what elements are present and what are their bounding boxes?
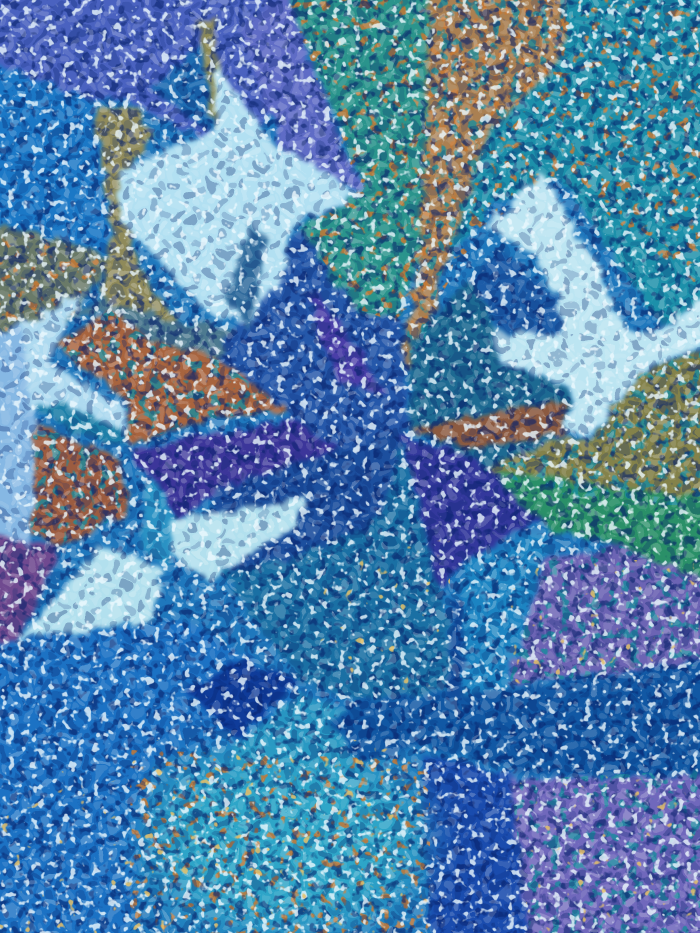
region: left bright blue [0, 60, 120, 290]
region: purple lower right [510, 770, 700, 933]
region: shadow strip near star [60, 300, 230, 360]
region: teal-blue right lower [462, 530, 550, 695]
region: soft teal glow at bottom centre [145, 745, 425, 933]
region: brown ray [405, 400, 565, 450]
dove: lower left [20, 545, 165, 640]
region: right of centre teal-blue [410, 270, 575, 470]
region: dark blue bottom [420, 755, 530, 933]
region: central blue field [220, 230, 410, 450]
region: dark blue band [330, 660, 700, 775]
dove wing: lower right [170, 497, 305, 580]
region: inner dark of right dove [470, 250, 575, 345]
region: purple right of dove [240, 0, 365, 190]
region: orange stripe beside top dove [95, 105, 175, 320]
region: dark blue wedge above dove [150, 30, 225, 140]
region: purple right [508, 545, 700, 685]
region: deep centre purple [400, 435, 540, 590]
wing stem: teal [140, 470, 178, 570]
region: teal wedge under chevron [235, 695, 355, 770]
region: centre lower teal [220, 440, 460, 700]
dove shadow: far left [35, 405, 125, 447]
region: green band [480, 470, 700, 585]
region: orange lower left [28, 420, 130, 548]
region: gold lower right [480, 345, 700, 505]
region: central teal-green [285, 0, 442, 315]
region: orange star [55, 310, 285, 445]
region: left purple-red [0, 525, 60, 645]
dove: top [120, 60, 362, 325]
region: top-left purple-blue [0, 0, 285, 150]
dove: far left [20, 290, 125, 445]
dove inner stripe: blue and brown [225, 225, 268, 330]
region: dark blue chevron [188, 660, 300, 742]
region: purple wedge [308, 290, 385, 395]
region: top right teal [445, 0, 700, 325]
region: lower-left blue [0, 620, 300, 933]
dark tail stroke [448, 600, 466, 700]
region: orange rays [400, 0, 565, 375]
speckles: gold accents [0, 540, 700, 933]
doves [0, 60, 700, 640]
dove: far left left strip [0, 320, 35, 550]
region: centre dark band [210, 430, 405, 570]
dove: right [485, 172, 700, 437]
region: gold brush stripe [198, 20, 226, 135]
region: left orange-teal mix [0, 225, 110, 335]
region: dark purple band [130, 420, 340, 522]
